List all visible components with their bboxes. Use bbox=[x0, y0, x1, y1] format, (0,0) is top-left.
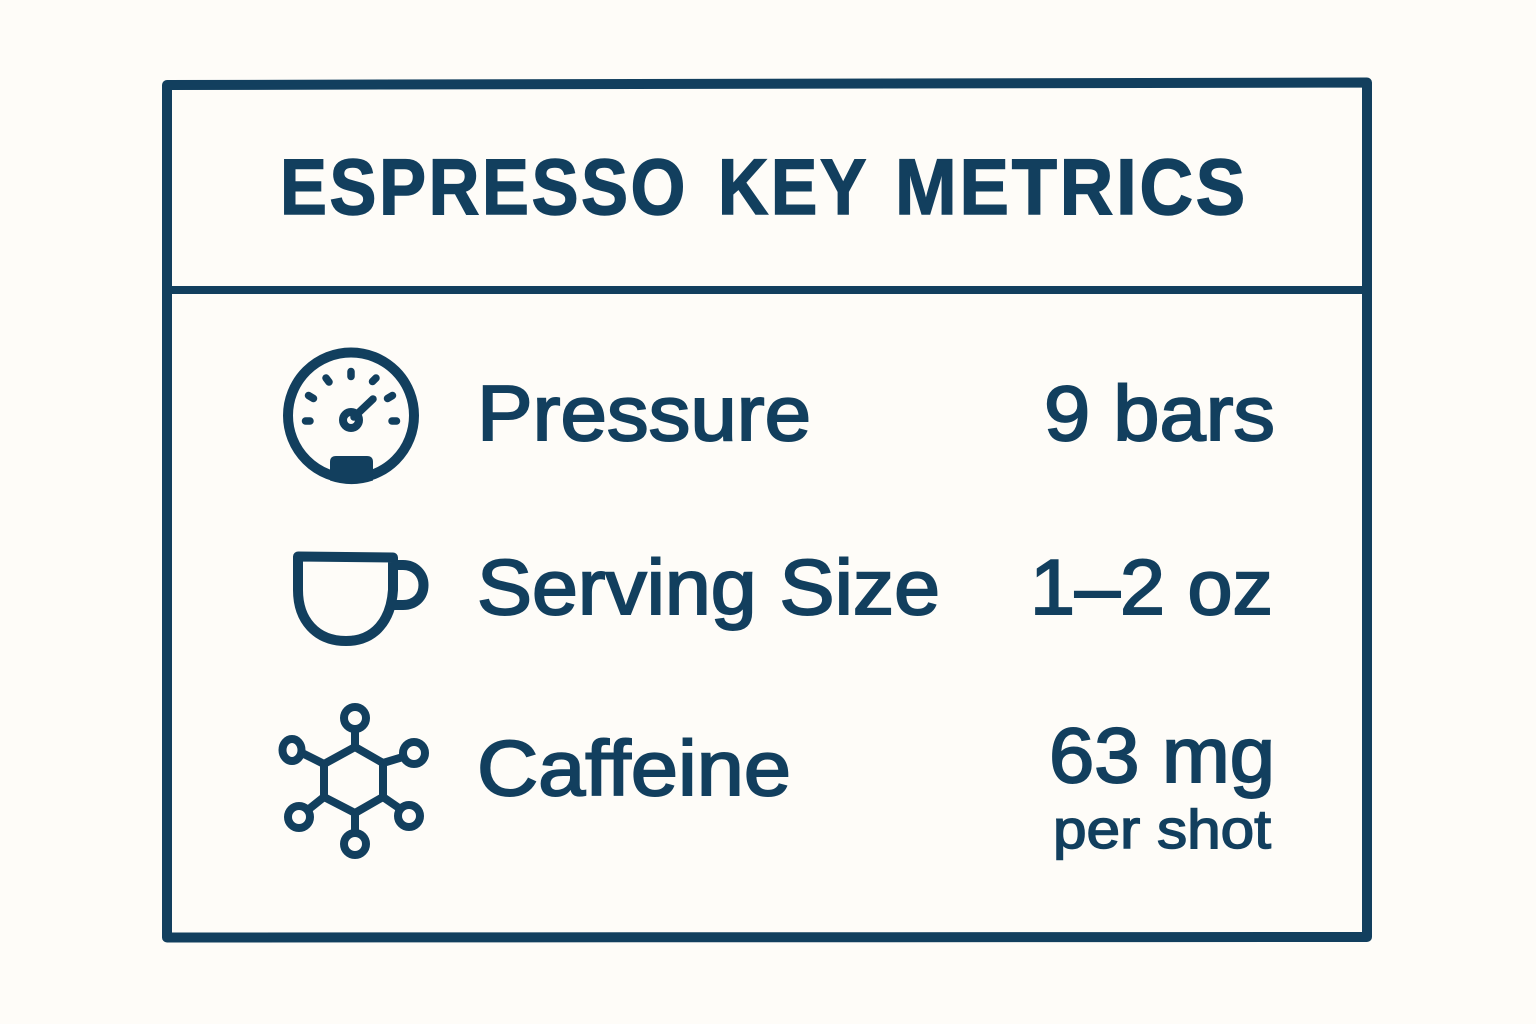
icon: pressure gauge bbox=[288, 352, 414, 484]
value: 63 mg per shot: per shot bbox=[1053, 798, 1271, 860]
value: 9 bars: 9 bars bbox=[1044, 369, 1275, 457]
header divider bbox=[167, 286, 1367, 294]
title: METRICS bbox=[895, 142, 1248, 231]
value: 63 mg per shot bbox=[1049, 711, 1275, 860]
icon: espresso cup bbox=[298, 556, 424, 641]
title: KEY bbox=[718, 142, 869, 231]
title: ESPRESSO bbox=[280, 142, 688, 231]
icon: caffeine molecule bbox=[282, 707, 425, 855]
label: pressure: Pressure bbox=[477, 369, 811, 457]
label: caffeine: Caffeine bbox=[477, 724, 791, 812]
title bbox=[280, 142, 1248, 231]
value: 1-2 oz: 1–2 oz bbox=[1030, 543, 1273, 631]
value: 63 mg per shot: 63 mg bbox=[1049, 711, 1275, 799]
panel: metrics card frame bbox=[167, 82, 1367, 938]
label: serving size: Serving Size bbox=[477, 543, 940, 631]
